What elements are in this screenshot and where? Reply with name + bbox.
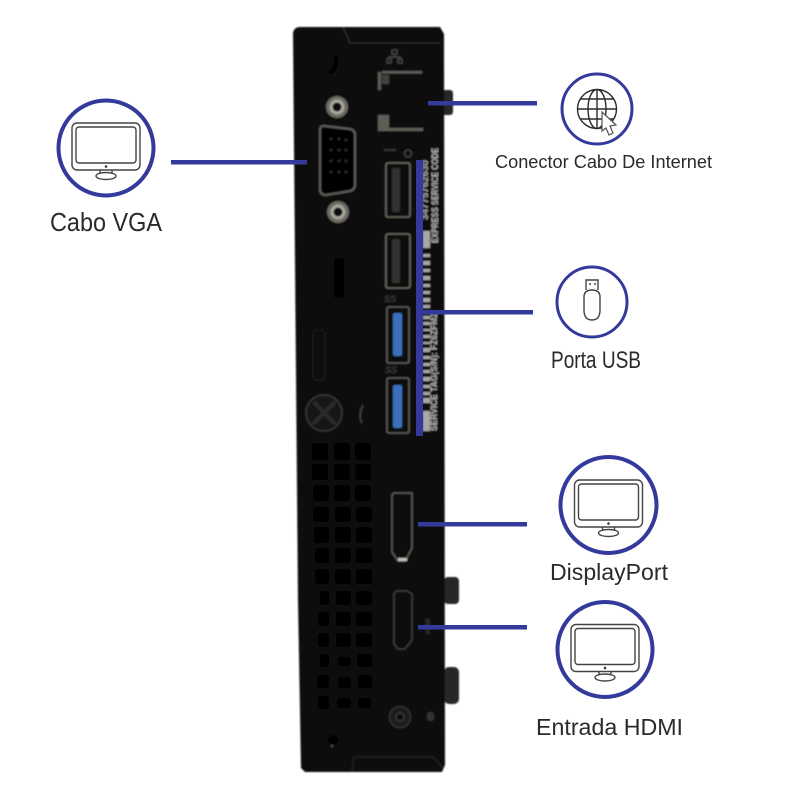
SS label 1: SS [384, 294, 396, 304]
port body [378, 71, 423, 131]
side nubs [442, 90, 459, 704]
security mark [313, 330, 325, 380]
connector line: DisplayPort [418, 522, 527, 526]
barcode [423, 231, 430, 431]
label: Conector Cabo De Internet: Conector Cabo De Internet [495, 152, 712, 172]
icon: USB drive [557, 267, 627, 337]
port metal frame [378, 71, 423, 131]
panel: computer rear view [293, 27, 459, 772]
case screw [306, 395, 342, 431]
icon: globe with cursor [562, 74, 632, 144]
VGA connector [320, 126, 355, 195]
express code number: 34775762630 [420, 160, 430, 220]
ethernet port [378, 71, 423, 131]
USB port 3 [387, 307, 409, 363]
HDMI port [394, 591, 412, 649]
connector line: HDMI [418, 625, 527, 630]
icon: monitor HDMI [558, 602, 652, 697]
lock slot [334, 258, 344, 298]
connector line: VGA [171, 160, 307, 164]
VGA port [320, 96, 355, 223]
top notch [343, 27, 440, 43]
computer case [293, 27, 445, 772]
DisplayPort port [392, 493, 412, 561]
icon: monitor DisplayPort [560, 457, 656, 553]
service code label: EXPRESS SERVICE CODE [430, 148, 441, 243]
label: Cabo VGA: Cabo VGA [50, 207, 163, 237]
VGA screw top [326, 96, 348, 118]
power mark [427, 712, 434, 721]
SS label 2: SS [385, 365, 397, 375]
power button [390, 706, 410, 728]
USB symbol [384, 150, 412, 157]
VGA screw bottom [327, 201, 349, 223]
USB port 1 [386, 163, 410, 217]
service tag label: SERVICE TAG(S/N): FZ6ZFM2 [429, 313, 440, 431]
connector line: USB [416, 160, 533, 436]
USB port 4 [387, 378, 409, 433]
icon: monitor VGA [58, 100, 154, 196]
connector line: internet [428, 101, 537, 106]
label: Porta USB: Porta USB [551, 347, 641, 374]
USB port 2 [386, 234, 410, 288]
network icon [387, 50, 402, 63]
label: DisplayPort: DisplayPort [550, 559, 669, 585]
bottom notch [352, 757, 443, 772]
small screw mark [360, 405, 363, 423]
ventilation grid [312, 443, 372, 709]
HDMI label: HDMI [426, 618, 432, 634]
rear hole [328, 735, 338, 748]
label: Entrada HDMI: Entrada HDMI [536, 714, 683, 740]
audio mark [329, 56, 336, 72]
